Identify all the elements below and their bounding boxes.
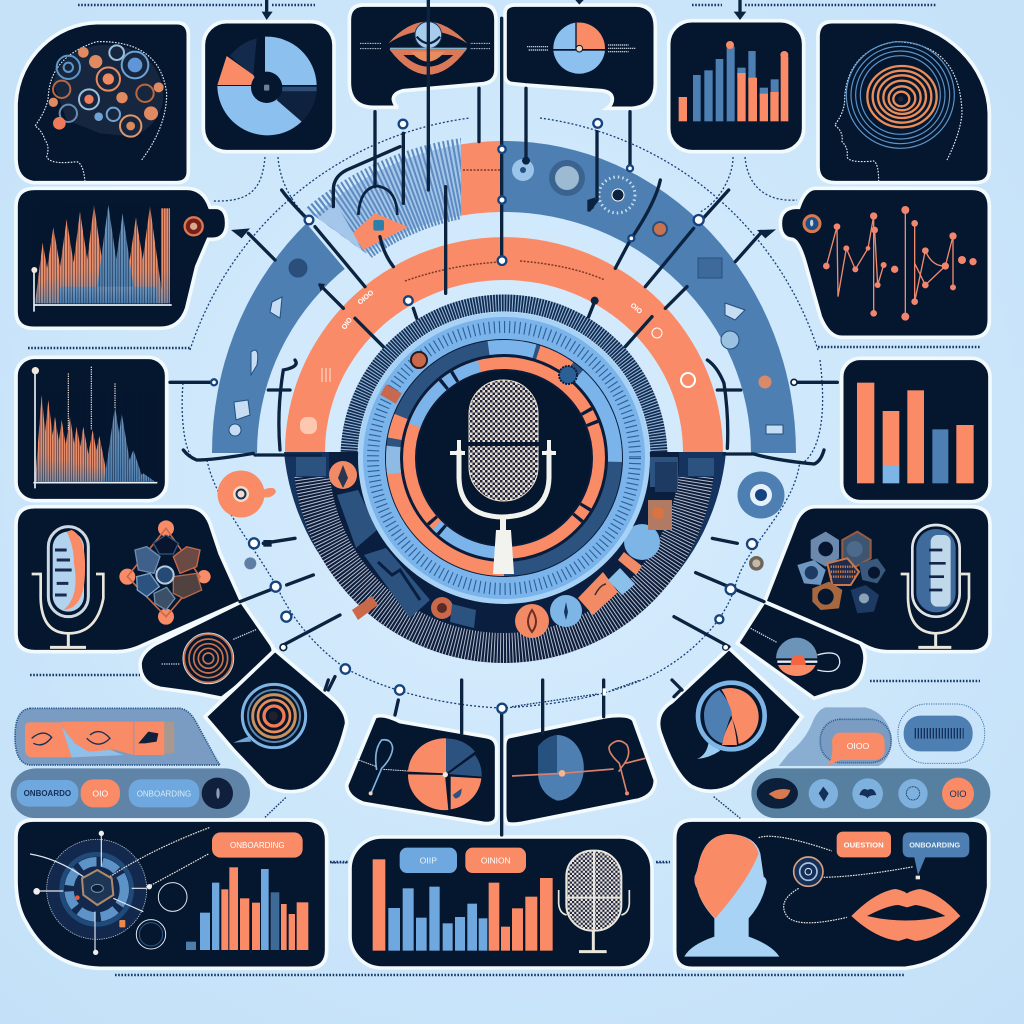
inner segments — [374, 328, 634, 588]
panel: waveform with nodes — [780, 188, 989, 337]
orange arc labels: OIO — [341, 316, 354, 331]
tiles and chips — [329, 461, 677, 638]
radial hatching band — [294, 477, 714, 663]
panel: pie with labels — [505, 5, 655, 108]
bars: OINION — [481, 856, 510, 866]
brain texture — [53, 45, 163, 137]
strip: pills left: OIO — [92, 789, 109, 799]
panel: brain head — [16, 23, 188, 183]
panel: eye — [349, 5, 496, 107]
side discs — [218, 470, 784, 518]
tick ring — [358, 312, 650, 604]
orange arc labels — [300, 289, 695, 434]
panel: spiral speech blob — [205, 650, 347, 792]
icon: headphones on hatched arc — [358, 186, 397, 231]
orange arc labels: OIO — [629, 302, 643, 316]
lower half dark ring — [284, 452, 726, 663]
bars: OIIP — [420, 856, 437, 866]
orange arc labels: OIOO — [357, 289, 376, 307]
panel: split pie right — [505, 716, 655, 824]
panel: spectrum chart — [16, 188, 227, 328]
icons on blue arc — [229, 159, 783, 436]
outer segments — [347, 301, 661, 615]
strip: speech band right — [779, 707, 892, 766]
outer segmented arc — [212, 141, 796, 727]
panel: head and lips — [675, 820, 989, 968]
panel: quartered pie left — [347, 716, 497, 824]
dotted guide arcs — [182, 118, 823, 708]
tile band — [329, 452, 679, 633]
panel: head and lips: OUESTION — [844, 840, 884, 849]
panel: donut pie — [203, 22, 334, 152]
connector lines and nodes — [170, 0, 837, 863]
hatched inner ring (upper) — [340, 294, 668, 452]
strip: pills left — [11, 768, 250, 818]
panel: radial hub and bars — [16, 820, 327, 968]
panel: radial hub and bars: ONBOARDING — [230, 841, 285, 850]
strip: orange icon band — [15, 708, 220, 765]
panel: microphone bars bottom — [350, 837, 652, 968]
panel: decay spectrum — [16, 357, 167, 501]
bars — [373, 848, 629, 952]
panel: mic and hex cluster left — [16, 507, 242, 652]
barcode pill — [898, 704, 985, 763]
panel: fingerprint head — [818, 22, 989, 183]
orange arc dotted captions — [405, 170, 605, 281]
strip: speech band right: OIOO — [847, 741, 870, 751]
central dial — [347, 301, 661, 615]
microphone — [450, 380, 556, 574]
arc: blue right — [503, 141, 796, 453]
strip: icon pills right: OIO — [949, 789, 967, 799]
strip: pills left: ONBOARDING — [137, 789, 191, 798]
arc: hatched section — [304, 138, 461, 258]
arc: orange section — [461, 141, 500, 216]
arc: blue left — [212, 224, 345, 453]
panel: five bar chart — [842, 358, 990, 502]
chips on dial — [411, 352, 427, 368]
panel: hex cluster and mic right — [765, 507, 990, 652]
panel: bar chart with dots — [669, 21, 804, 152]
panel: spiral fingerprint — [140, 602, 273, 698]
panels — [16, 5, 496, 183]
panel: head and lips: ONBOARDING — [909, 841, 960, 850]
dark disc — [417, 371, 591, 545]
inner orange arc — [285, 237, 723, 452]
strip: icon pills right — [751, 768, 990, 818]
strip: pills left: ONBOARDO — [24, 789, 71, 798]
panel: pie speech bubble — [659, 648, 802, 791]
panel: gauge icon blob — [737, 602, 865, 698]
